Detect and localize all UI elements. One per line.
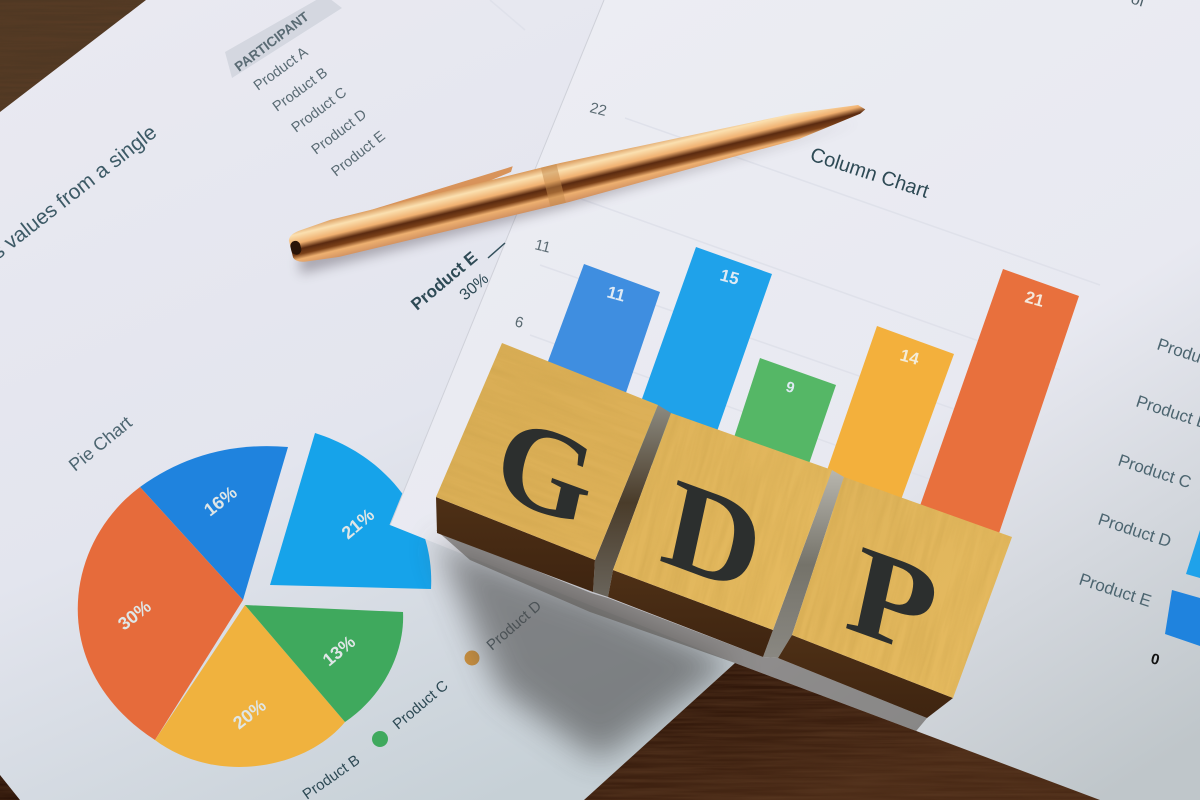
participant table: Product B [270,65,331,115]
slice: 30% [78,487,243,740]
pie labels [114,482,378,733]
block P: P [837,518,949,684]
axis labels: 6 [513,313,525,332]
gold pen [284,82,870,268]
slice: 20% [155,605,345,767]
block P [778,477,1012,718]
block G [436,343,658,592]
right side legend: Product C [1116,451,1194,492]
left paper [0,0,735,800]
participant table: Product A [251,44,311,94]
participant table [225,0,389,180]
pen shadow [300,122,860,274]
slice: 13% [245,605,403,722]
bar: 9: 9 [784,378,796,397]
pie labels: 16% [200,482,241,520]
bar: 15 [622,247,772,480]
pie labels: 13% [319,632,359,670]
bar: 9 [725,358,836,490]
right side legend [1077,335,1200,646]
bar: 21 [915,269,1079,560]
bar: 11 [530,264,660,440]
gap between blocks D and P [763,470,844,658]
participant table: Product D [309,107,370,158]
gap between blocks G and D [593,405,671,597]
pie chart [78,433,431,767]
participant table: Product E [329,128,389,180]
faint fold mark [490,0,525,30]
pie labels: 30% [114,596,155,634]
pie legend: Product D [483,597,545,654]
pie legend [300,597,545,800]
right paper [390,0,1200,800]
bar: 15: 15 [718,266,741,289]
axis labels: 22 [588,99,608,120]
bar: 11: 11 [605,283,627,306]
pie labels: 20% [229,695,270,733]
column chart title: Column Chart [807,144,932,203]
block D: D [652,451,775,621]
right side legend: Product D [1096,510,1174,551]
bar: 14 [815,326,954,530]
right side legend: Product E [1077,570,1154,611]
block G: G [484,388,608,553]
pie labels: 21% [338,505,378,543]
slice: 21% exploded [270,433,431,589]
slice: 16% [140,446,288,600]
column chart bars [530,247,1079,560]
axis labels [513,99,1161,669]
axis labels: 11 [533,236,552,257]
bar: 14: 14 [898,346,922,369]
participant table: Product C [289,85,350,136]
product E label: 30% [457,270,492,304]
pie legend: Product C [390,677,452,733]
pie chart title: Pie Chart [65,412,136,475]
block D [608,413,832,657]
block cast shadow [436,530,927,760]
product E label: Product E [407,248,481,314]
axis labels: 0 [1149,650,1161,669]
participant table: PARTICIPANT [232,9,312,74]
bar: 21: 21 [1023,288,1046,311]
